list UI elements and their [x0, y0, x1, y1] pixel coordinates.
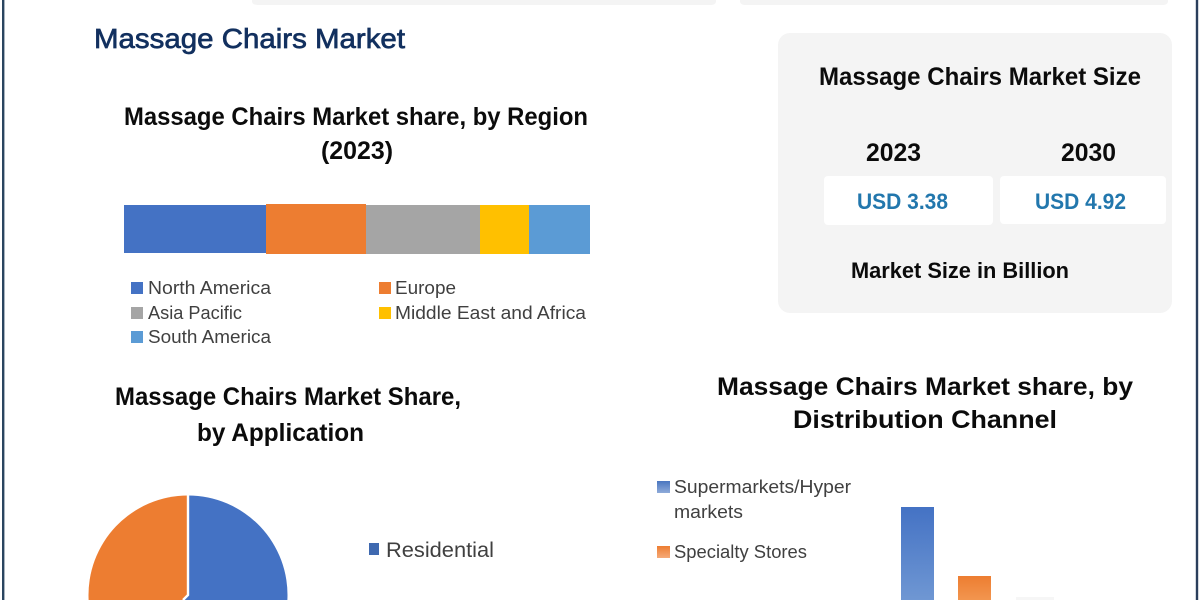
heading: distribution channel: Distribution Channel — [793, 406, 1057, 434]
channel legend: Supermarkets/Hyper — [674, 477, 851, 497]
region legend: Asia Pacific — [148, 303, 242, 323]
pie chart — [89, 496, 287, 600]
top cropped panels — [252, 0, 1168, 5]
application share chart — [89, 383, 494, 600]
heading: distribution channel: Massage Chairs Market share, by — [717, 373, 1133, 401]
value box 2030 — [1000, 176, 1166, 224]
channel bars — [901, 507, 1054, 600]
title: Massage Chairs Market — [94, 23, 405, 54]
heading: region share: Massage Chairs Market share, by Region — [124, 103, 588, 131]
heading: distribution channel — [717, 373, 1133, 434]
panel: market size — [778, 33, 1172, 313]
market size heading: Massage Chairs Market Size — [819, 63, 1141, 91]
distribution channel chart — [657, 373, 1133, 600]
region legend: Middle East and Africa — [395, 303, 587, 323]
heading: region share — [124, 103, 588, 165]
region share chart — [124, 103, 590, 347]
stacked bar — [124, 204, 590, 254]
heading: application share: by Application — [197, 419, 364, 447]
heading: application share: Massage Chairs Market Share, — [115, 383, 461, 411]
value box 2023 — [824, 176, 993, 225]
value box 2023: USD 3.38 — [857, 189, 948, 214]
region legend: Europe — [395, 278, 456, 298]
heading: application share — [115, 383, 461, 447]
region legend: North America — [148, 278, 272, 298]
region legend — [131, 278, 587, 347]
pie legend: Residential — [386, 539, 494, 562]
year 2030: 2030 — [1061, 139, 1116, 167]
value box 2030: USD 4.92 — [1035, 189, 1126, 214]
channel legend: markets — [674, 502, 743, 522]
market size unit note: Market Size in Billion — [851, 258, 1069, 283]
year 2023: 2023 — [866, 139, 921, 167]
channel legend — [657, 477, 851, 562]
channel legend: Specialty Stores — [674, 542, 807, 562]
heading: region share: (2023) — [321, 137, 393, 165]
region legend: South America — [148, 327, 272, 347]
